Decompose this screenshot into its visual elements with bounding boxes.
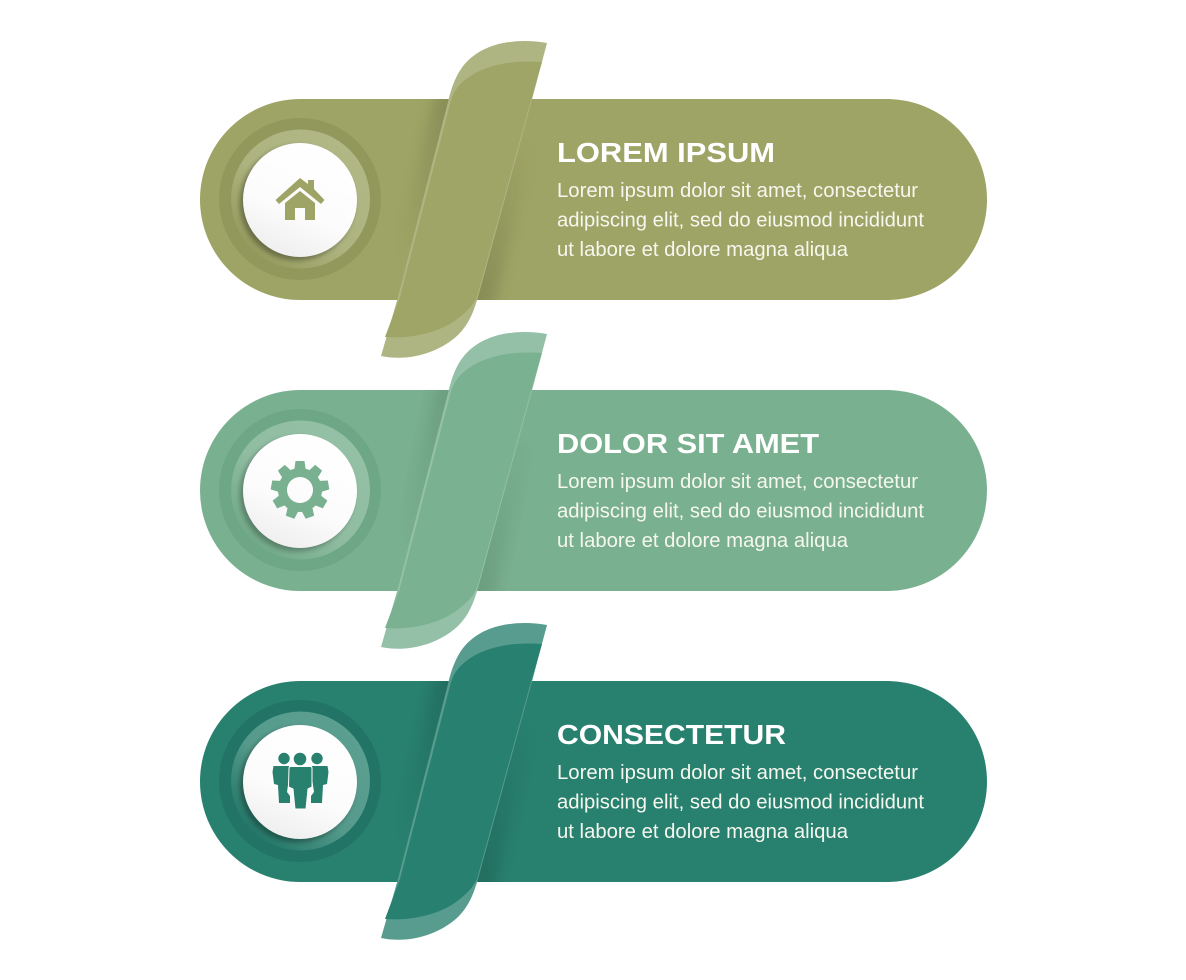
leaf xyxy=(381,623,547,940)
heading: LOREM IPSUM xyxy=(557,137,775,168)
body text: Lorem ipsum dolor sit amet, consectetur xyxy=(557,470,918,493)
heading: CONSECTETUR xyxy=(557,719,786,750)
body text: Lorem ipsum dolor sit amet, consectetur xyxy=(557,179,918,202)
body text: ut labore et dolore magna aliqua xyxy=(557,529,849,552)
body text: Lorem ipsum dolor sit amet, consectetur xyxy=(557,761,918,784)
panel: lorem ipsum xyxy=(200,41,987,358)
pill background xyxy=(200,390,987,591)
icon: people xyxy=(272,753,328,809)
leaf shadows xyxy=(425,681,506,882)
icon: house xyxy=(276,178,324,220)
body text: adipiscing elit, sed do eiusmod incididunt xyxy=(557,790,924,814)
badge xyxy=(219,409,381,571)
pill background xyxy=(200,99,987,300)
body text: adipiscing elit, sed do eiusmod incididunt xyxy=(557,208,924,232)
body text xyxy=(557,179,924,261)
body text xyxy=(557,761,924,843)
body text: ut labore et dolore magna aliqua xyxy=(557,238,849,261)
badge xyxy=(219,118,381,280)
body text: adipiscing elit, sed do eiusmod incididunt xyxy=(557,500,924,522)
body text: ut labore et dolore magna aliqua xyxy=(557,820,849,843)
panel: dolor sit amet xyxy=(200,332,987,649)
panel: consectetur xyxy=(200,623,987,940)
leaf xyxy=(381,332,547,649)
badge xyxy=(219,700,381,862)
icon: gear xyxy=(270,461,330,519)
heading: DOLOR SIT AMET xyxy=(557,428,819,459)
leaf xyxy=(381,41,547,358)
leaf shadows xyxy=(424,390,506,591)
body text xyxy=(557,470,924,552)
leaf shadows xyxy=(421,99,510,300)
pill background xyxy=(200,681,987,882)
